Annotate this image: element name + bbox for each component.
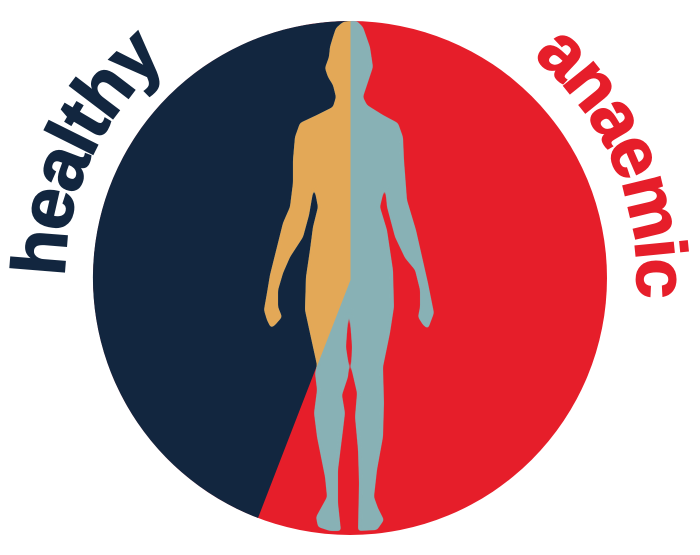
healthy navy portion (93, 21, 350, 518)
body silhouette (264, 21, 434, 531)
pie circle (93, 21, 607, 535)
anaemic red portion (93, 21, 607, 535)
label: healthy: healthy (9, 30, 160, 273)
body: anaemic teal (264, 21, 434, 531)
body: healthy orange (264, 21, 350, 370)
label: anaemic: anaemic (538, 35, 689, 298)
